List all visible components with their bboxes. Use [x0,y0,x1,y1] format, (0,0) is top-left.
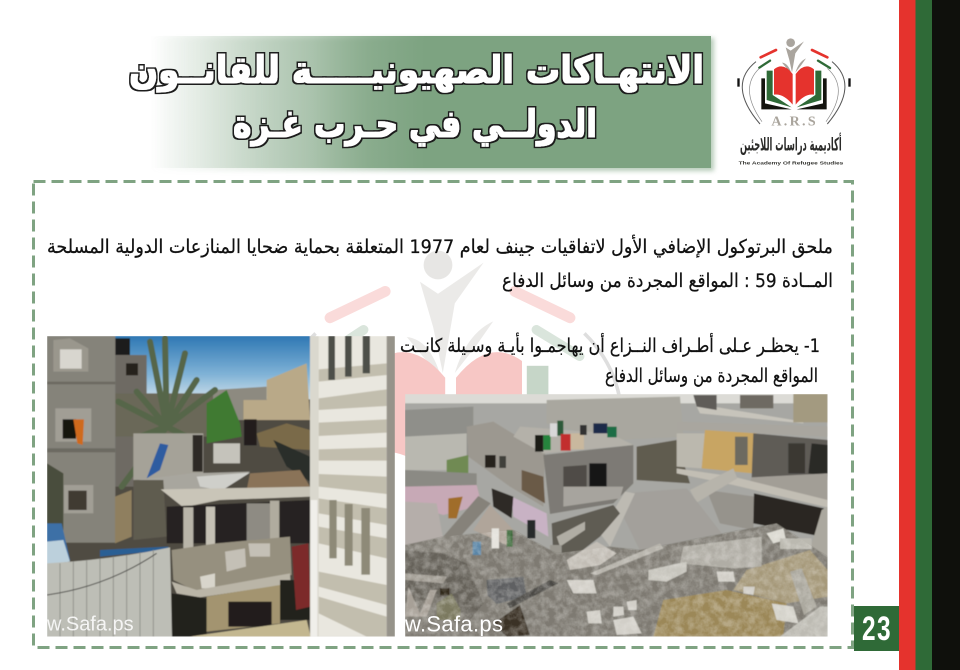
logo: Academy of Refugee Studies: أكاديمية دراسات اللاجئين [740,133,842,156]
paragraph: article 59 line: المــادة 59 : المواقع المجردة من وسائل الدفاع [502,270,833,292]
rubble texture [405,523,828,637]
page number: 23 [862,610,892,648]
logo: Academy of Refugee Studies [737,38,851,166]
title line 1: الانتهـاكات الصهيونيـــــة للقانــون [129,48,704,92]
paragraph: protocol heading line: ملحق البرتوكول الإضافي الأول لاتفاقيات جينف لعام 1977 المتعلقة بحماية ضحايا المنازعات الدولية المسلحة [47,235,833,258]
photo: destroyed buildings and rubble [404,394,828,637]
page number badge [854,606,899,651]
title banner [129,36,714,171]
photo scene [47,336,395,637]
photo watermark text: w.Safa.ps [46,614,134,636]
watermark logo [276,251,622,558]
logo english name: The Academy Of Refugee Studies [739,160,844,166]
photo: damaged house beside white building [46,336,395,637]
logo figure [786,38,795,47]
dashed content frame [34,182,852,648]
logo initials: A.R.S [771,114,818,129]
side stripes [899,0,960,670]
photo watermark text: w.Safa.ps [404,612,503,637]
banner gradient [150,36,711,168]
banner shadow [150,38,714,171]
logo book [761,78,827,109]
logo arcs [761,50,827,57]
paragraph: clause 1 line 2: المواقع المجردة من وسائل الدفاع [605,365,818,387]
title line 2: الدولــي في حـرب غـزة [233,102,597,147]
photo scene [405,394,828,637]
paragraph: clause 1 line 1: 1- يحظـر عـلى أطـراف النــزاع أن يهاجمـوا بأيـة وسـيلة كانــت [400,332,820,357]
